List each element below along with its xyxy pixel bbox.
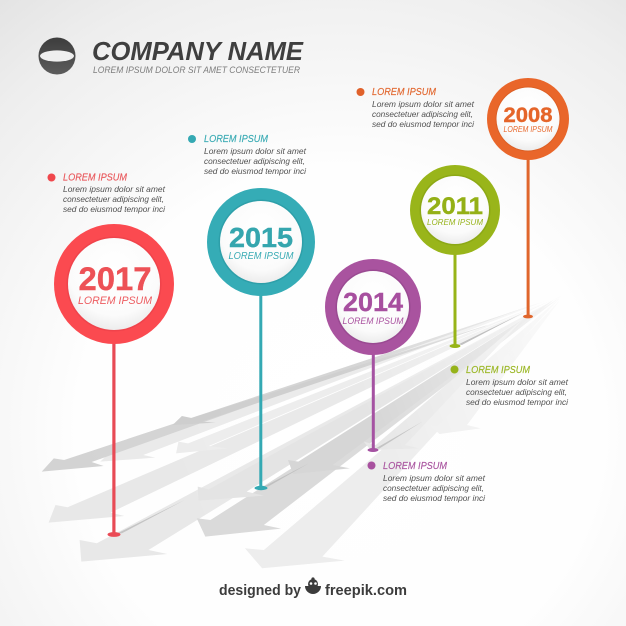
text block: 2015: consectetuer adipiscing elit, [204,156,305,166]
text block: 2014: consectetuer adipiscing elit, [383,483,484,493]
marker: 2014: LOREM IPSUM [342,316,404,327]
marker: 2014: 2014 [343,289,404,317]
text block: 2017 [48,172,166,214]
marker: 2017: 2017 [78,261,152,297]
text block: 2017: Lorem ipsum dolor sit amet [63,184,166,194]
marker: 2008: LOREM IPSUM [504,125,553,134]
text block: 2017: LOREM IPSUM [63,172,128,184]
text block: 2017: sed do eiusmod tempor inci [63,204,166,214]
marker: 2014 [325,259,421,452]
marker: 2011 [410,165,500,348]
text block: 2011: LOREM IPSUM [466,365,531,376]
marker: 2008: 2008 [504,103,553,127]
text block: 2008 [356,87,475,129]
text block: 2014: sed do eiusmod tempor inci [383,493,486,503]
text block: 2015: LOREM IPSUM [204,134,269,145]
footer credit: freepik.com [325,583,407,599]
icon: freepik mascot [305,577,321,594]
marker: 2015: 2015 [229,222,293,253]
marker: 2015: LOREM IPSUM [228,251,294,262]
marker: 2011: 2011 [427,193,483,220]
title: COMPANY NAME [92,38,304,66]
subtitle: LOREM IPSUM DOLOR SIT AMET CONSECTETUER [93,65,300,76]
text block: 2014: Lorem ipsum dolor sit amet [383,473,486,483]
footer credit [219,577,407,599]
text block: 2011: sed do eiusmod tempor inci [466,397,569,407]
marker: 2017: LOREM IPSUM [78,295,153,307]
text block: 2011: Lorem ipsum dolor sit amet [466,377,569,387]
text block: 2008: sed do eiusmod tempor inci [372,119,475,129]
text block: 2014: LOREM IPSUM [383,461,448,472]
marker: 2015 [207,188,315,490]
text block: 2011 [450,365,569,407]
text block: 2015: Lorem ipsum dolor sit amet [204,146,307,156]
text block: 2017: consectetuer adipiscing elit, [63,194,164,204]
logo icon [38,38,76,74]
text block: 2015: sed do eiusmod tempor inci [204,166,307,176]
text block: 2008: LOREM IPSUM [372,87,437,98]
text block: 2008: consectetuer adipiscing elit, [372,109,473,119]
perspective arrows [42,295,563,568]
marker: 2017 [54,224,174,537]
marker: 2011: LOREM IPSUM [427,217,484,227]
footer credit: designed by [219,583,301,599]
marker: 2008 [487,78,569,318]
text block: 2014 [368,461,486,503]
text block: 2008: Lorem ipsum dolor sit amet [372,99,475,109]
text block: 2015 [188,134,307,176]
text block: 2011: consectetuer adipiscing elit, [466,387,567,397]
